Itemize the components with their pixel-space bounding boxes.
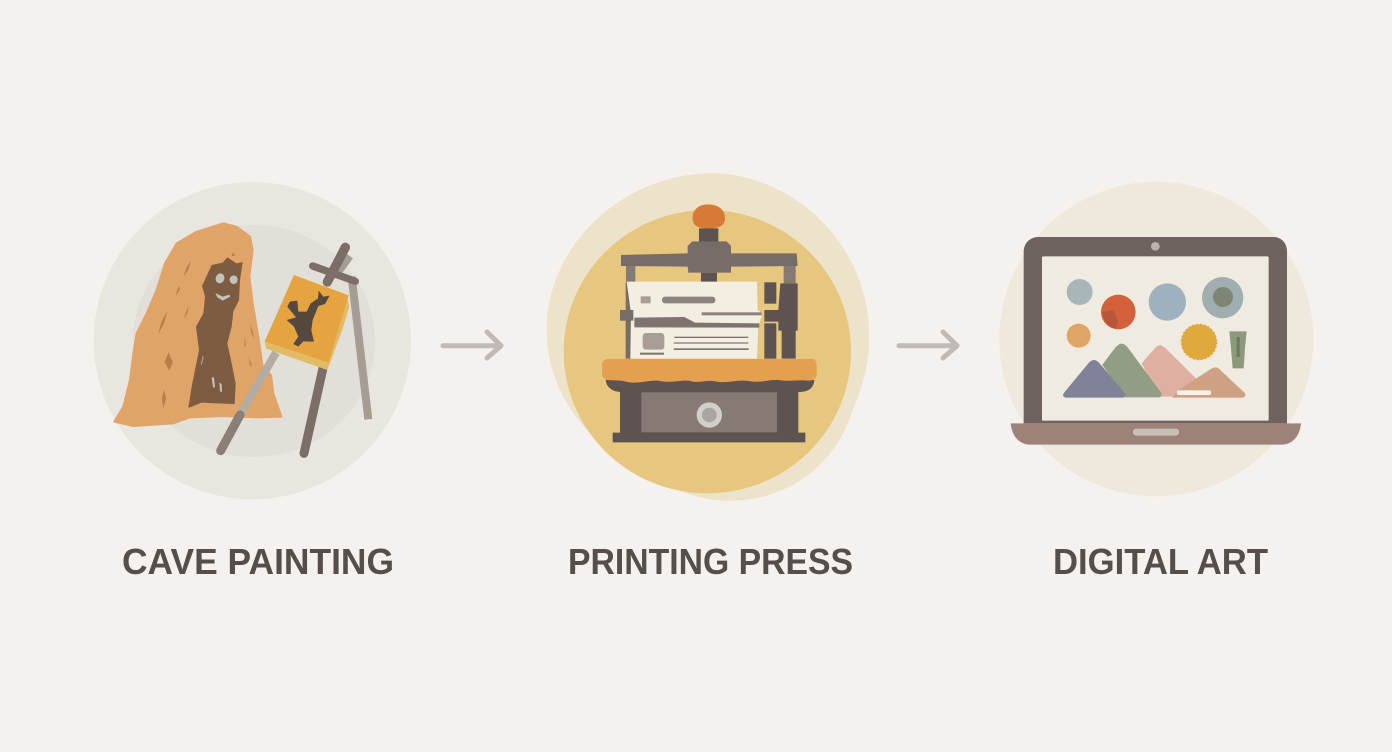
label: printing press: PRINTING PRESS [568,541,853,582]
label: cave painting: CAVE PAINTING [122,541,394,582]
icon: cave painting [94,182,411,499]
inner circle [133,225,375,457]
label: digital art: DIGITAL ART [1053,541,1268,582]
webcam [1151,242,1160,251]
trackpad notch [1133,429,1179,436]
knob [693,204,725,228]
drawer [641,392,777,432]
easel [221,247,368,453]
rock cracks [158,252,255,409]
outer circle [94,182,411,499]
inner circle [564,210,851,493]
arrow: cave to press [443,332,501,358]
canvas figure [287,291,330,347]
sun [1181,324,1217,360]
icon: laptop with digital art [999,182,1313,496]
base table [606,380,814,442]
crossbar [621,241,798,273]
outer blob [547,173,869,501]
drawer knob [697,402,722,428]
right post [784,266,796,283]
arrow: press to digital [899,332,957,358]
cave eyes and mouth [201,272,238,392]
laptop base [1011,423,1301,445]
paper details [634,296,762,355]
side clamp [620,310,633,321]
screen [1042,256,1269,421]
orange platen [602,359,817,383]
laptop lid [1024,237,1287,423]
background circle [999,182,1313,496]
circles [1067,277,1243,348]
canvas [265,275,349,370]
cave opening [188,257,243,408]
cave rock [114,223,281,426]
paper [627,282,762,359]
paint tube [1229,331,1247,368]
screw [699,228,718,245]
icon: printing press [547,173,869,501]
mountains [1063,344,1245,398]
left post [626,266,635,283]
